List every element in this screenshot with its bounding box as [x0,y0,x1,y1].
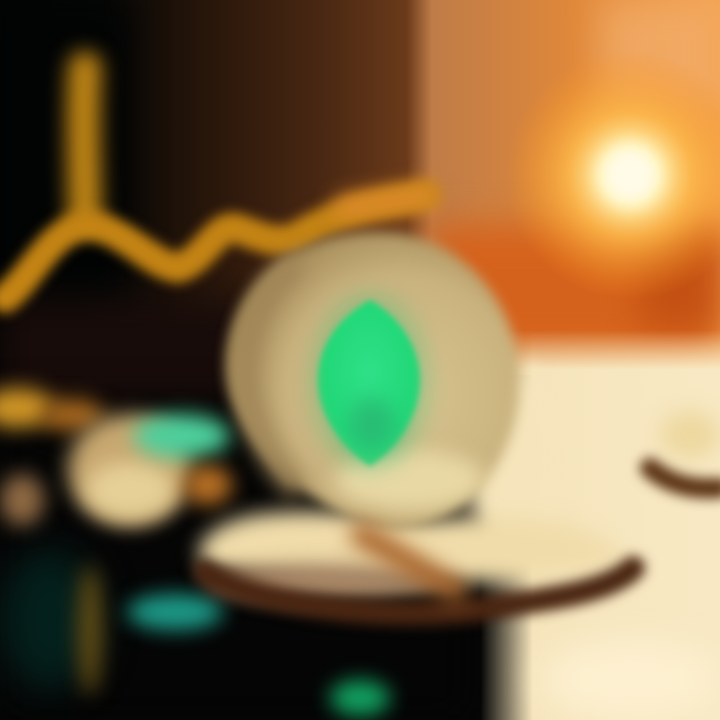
far right scale pan [650,411,720,488]
gold chart line [5,68,425,298]
cream pan highlight [200,511,625,583]
dark pan rim [205,568,633,613]
green gem [310,292,430,472]
coin stand [362,535,455,590]
pan surface [205,564,435,600]
coin [226,232,520,590]
background: bright tabletop [465,330,720,720]
scale pan with coins [200,511,633,613]
sun glow [505,50,720,300]
coin lower glow [335,450,485,510]
lower left dark area with teal and gold reflections [0,550,390,716]
coin left rim [247,262,300,490]
coin body [226,232,520,530]
left warm blobs: coins on the far scale pan [0,388,232,526]
